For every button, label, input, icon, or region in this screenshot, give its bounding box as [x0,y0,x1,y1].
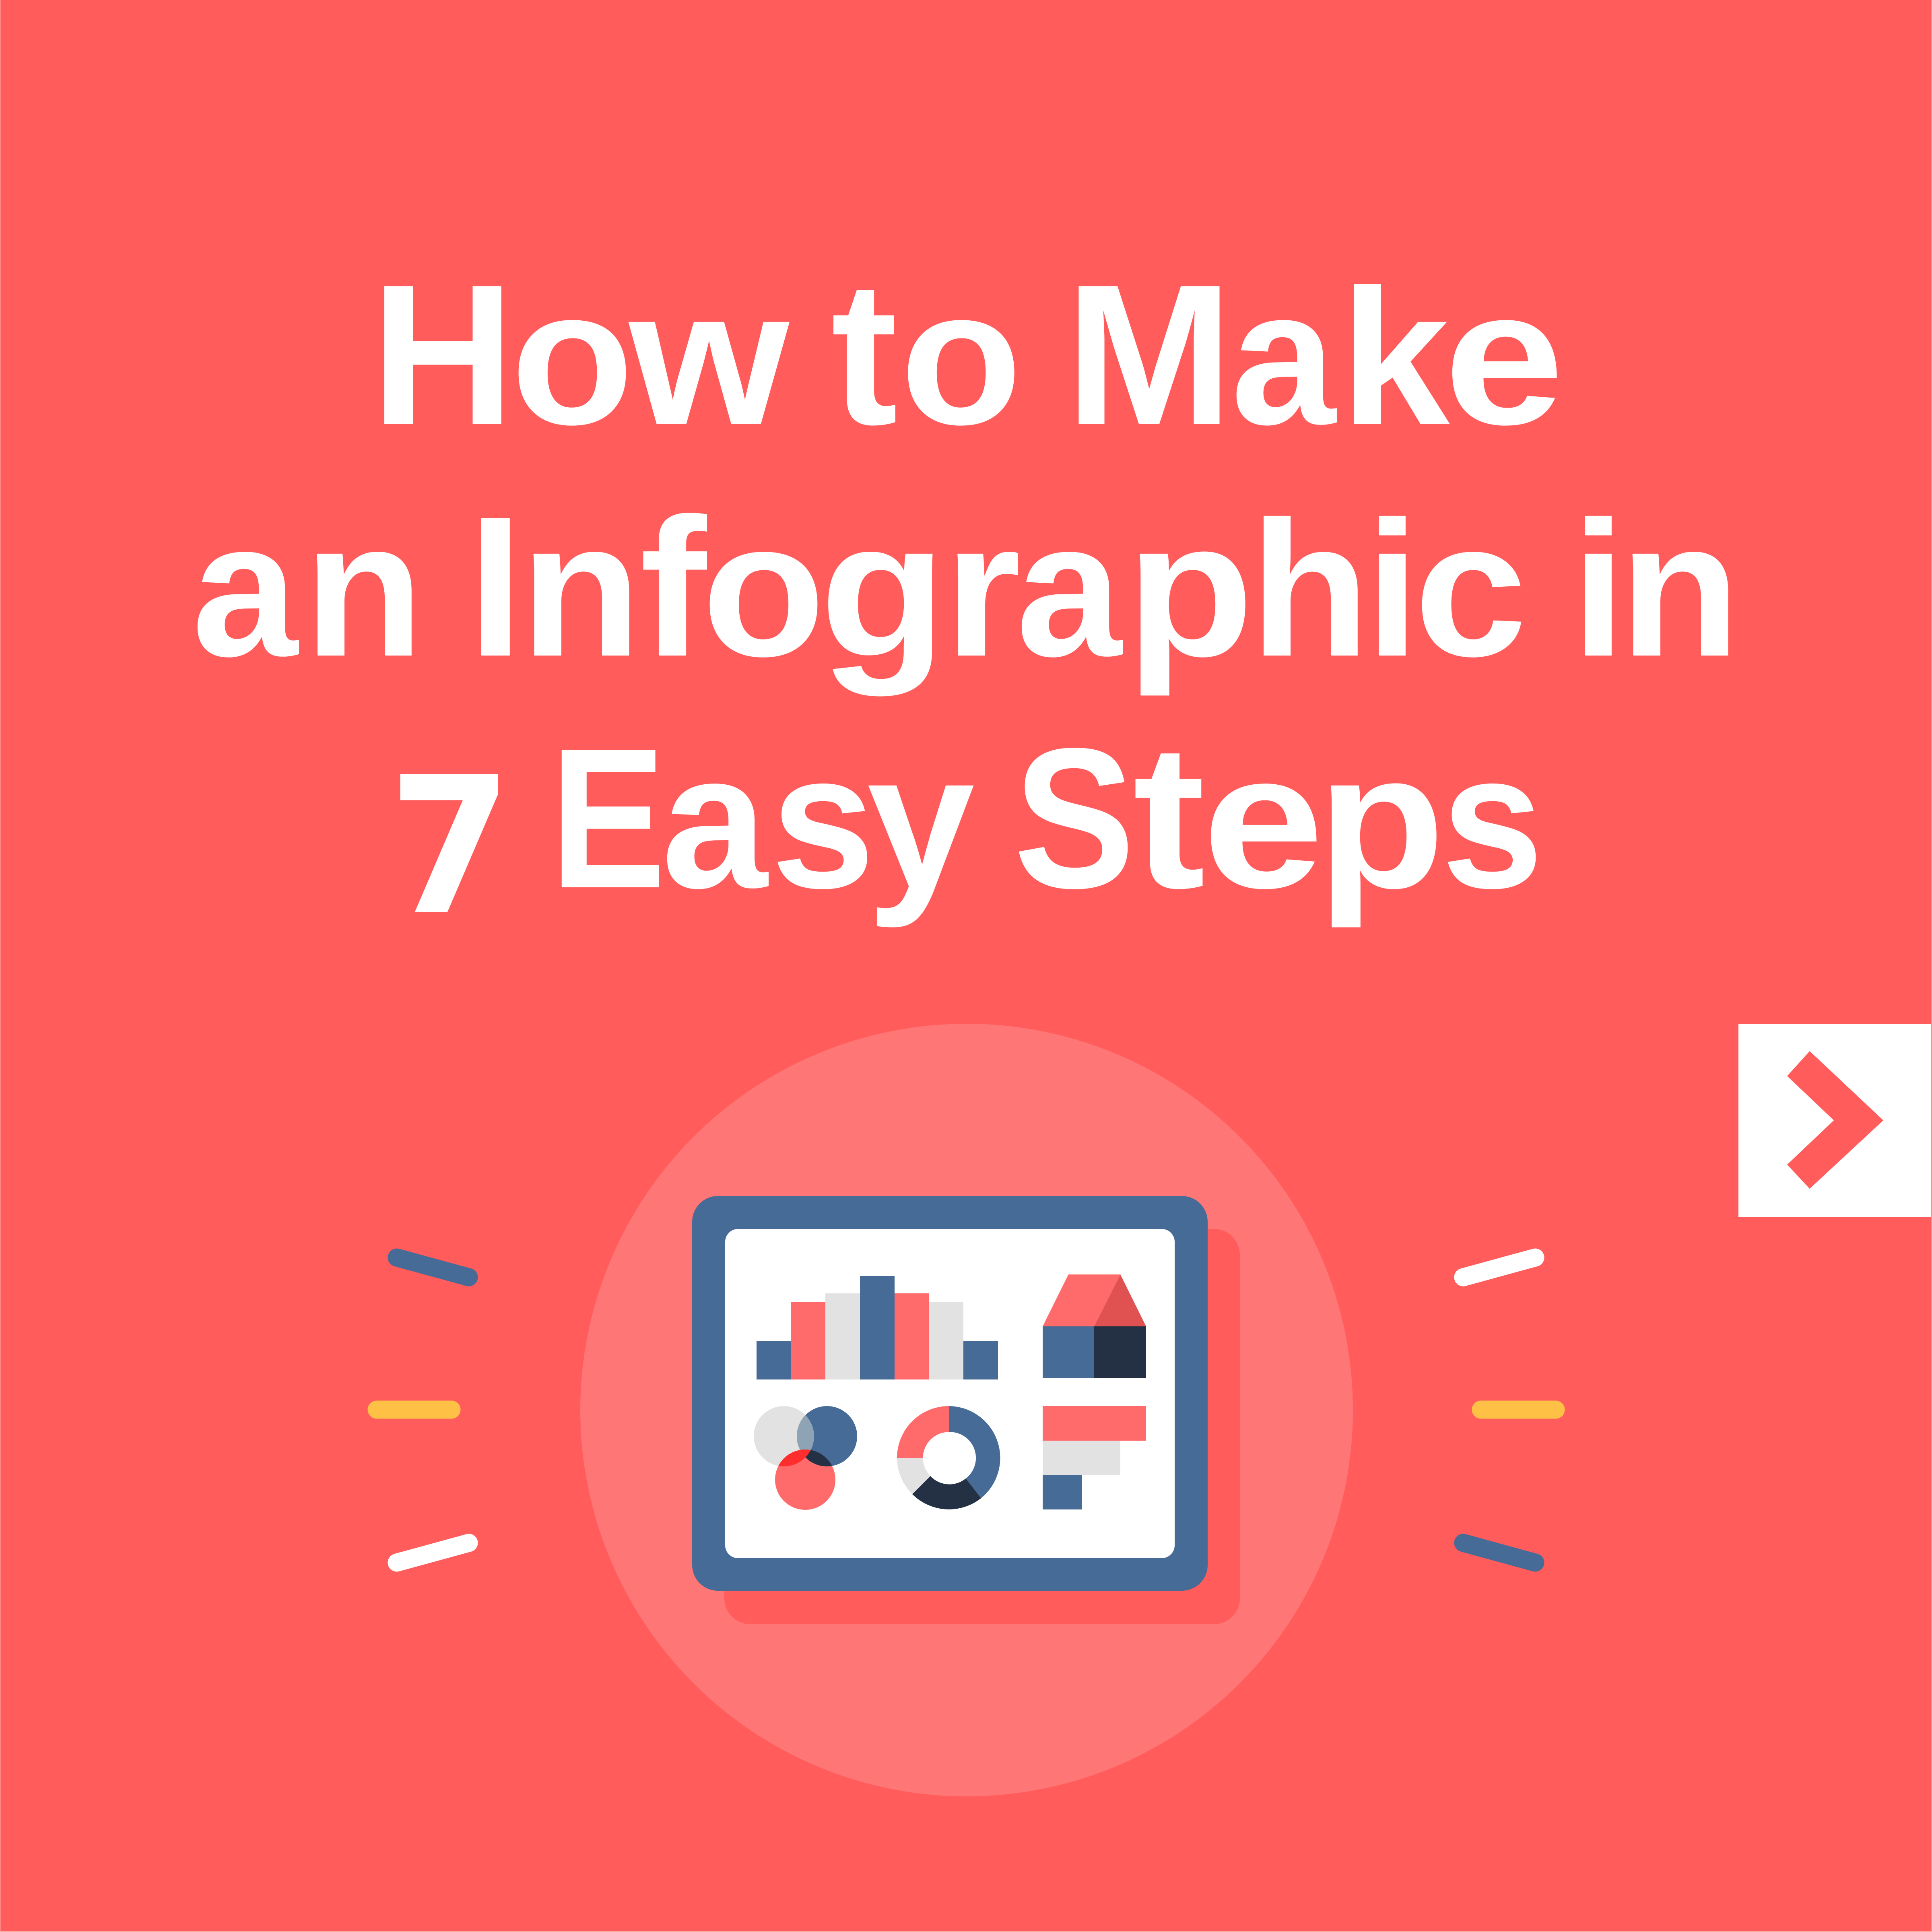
title line 2: a [1016,481,1123,697]
title line 3: y [867,713,976,930]
title line 1 [371,238,1564,468]
title line 1: H [371,243,515,466]
icon: chevron arrow [1787,1051,1883,1189]
title line 1: t [831,238,898,468]
venn diagram [754,1406,857,1510]
light background circle [580,1024,1353,1796]
title line 3: s [771,713,875,928]
title line 2: h [1250,481,1370,697]
right accent lines [1463,1258,1556,1563]
title line 2: f [640,477,709,697]
title line 3: 7 [388,736,512,957]
left accent lines [377,1258,469,1563]
title line 1: M [1065,243,1233,466]
title line 2: g [820,481,946,698]
title line 2 [192,475,1740,698]
horizontal bar chart [1043,1406,1146,1509]
title line 1: k [1340,249,1451,465]
title line 2: I [468,475,523,698]
title line 2: r [944,481,1021,697]
tablet body [692,1196,1208,1591]
title line 3: E [550,707,666,930]
title line 2: i [1571,481,1625,697]
title line 1: w [626,249,790,465]
title line 2: n [304,481,424,697]
house chart [1043,1274,1146,1378]
title line 2: o [702,481,825,697]
title line 3: S [1014,707,1135,930]
title line 1: o [511,249,634,465]
title line 2: c [1414,481,1527,697]
title [192,238,1740,957]
next arrow button [1738,1024,1932,1217]
tablet shadow [724,1229,1240,1624]
title line 2: i [1365,481,1419,697]
title line 3: p [1317,713,1445,930]
white line left [397,1543,469,1563]
blue line left [397,1258,469,1277]
blue line right [1463,1543,1535,1563]
title line 2: n [1619,481,1740,697]
title line 2: n [520,481,641,697]
tablet screen [725,1229,1175,1558]
title line 3: e [1202,713,1324,928]
title line 3: a [662,713,769,928]
white line right [1463,1258,1535,1277]
title line 1: e [1444,249,1564,465]
tablet illustration [692,1196,1240,1624]
yellow line left [377,1400,452,1419]
title line 3 [388,702,1543,957]
title line 1: a [1231,249,1337,465]
donut chart [897,1406,1000,1509]
title line 2: p [1126,481,1254,698]
title line 3: s [1441,713,1543,928]
bar chart [757,1276,998,1379]
title line 1: o [900,249,1022,465]
title line 3: t [1133,702,1205,931]
yellow line right [1481,1400,1556,1419]
title line 2: a [192,481,299,697]
